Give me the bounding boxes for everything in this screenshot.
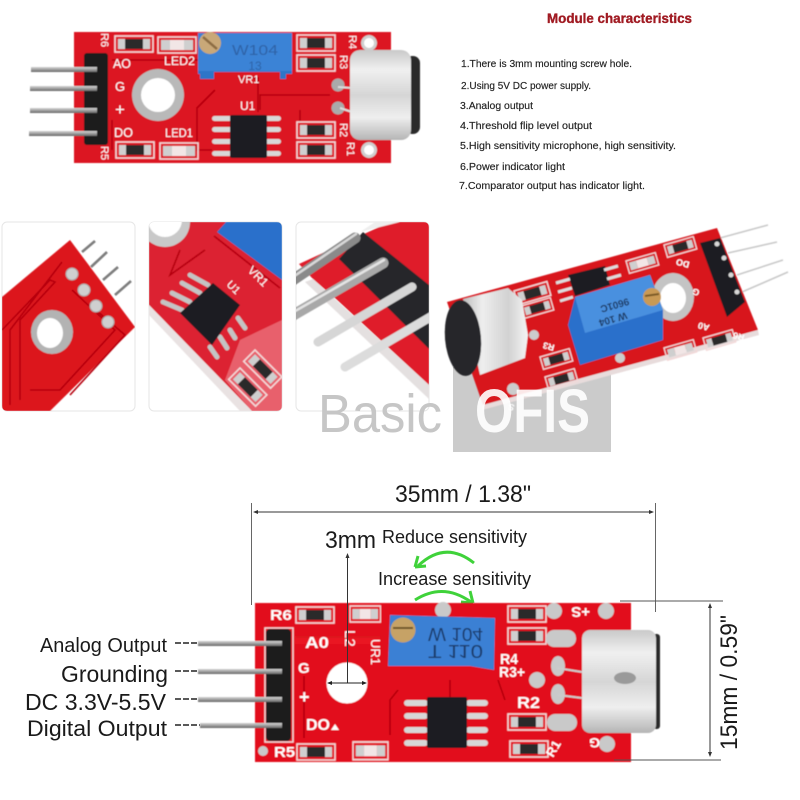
angled potentiometer: W 104 <box>597 309 628 328</box>
bottom silkscreen labels: L2 <box>341 630 358 647</box>
angled PCB <box>447 228 758 405</box>
bottom module board photo <box>198 602 660 762</box>
panel 2 PCB <box>149 222 282 411</box>
heading: module characteristics: Module characteristics <box>547 11 692 26</box>
bottom chip <box>404 697 488 748</box>
panel 3 PCB <box>299 222 429 385</box>
pin leader dashes <box>175 643 200 725</box>
panel 2 SMD <box>229 350 282 406</box>
top silkscreen labels: LED2 <box>164 54 195 68</box>
angled silkscreen labels: S <box>507 402 516 413</box>
panel: back of board detail <box>2 222 135 411</box>
watermark: Basic: Basic <box>318 384 442 444</box>
bottom traces <box>296 637 505 738</box>
panel: chip detail <box>148 222 282 412</box>
top silkscreen labels: R4 <box>346 35 358 49</box>
panel 3 pins <box>290 234 432 367</box>
panel 2 chip <box>163 275 245 357</box>
bottom silkscreen labels: R2 <box>517 695 540 712</box>
pin labels: Grounding <box>61 661 168 687</box>
height dimension: 15mm / 0.59" <box>716 615 743 750</box>
bottom pin header <box>265 628 293 742</box>
bottom silkscreen labels: DO <box>306 717 330 734</box>
top potentiometer: 13 <box>248 59 262 73</box>
angled silkscreen labels: R6 <box>732 330 746 343</box>
bottom silkscreen labels <box>270 603 600 761</box>
angled SMD parts <box>507 237 736 395</box>
top pin header <box>84 53 108 145</box>
bottom silkscreen labels: G <box>298 660 310 677</box>
bottom pins <box>198 641 282 728</box>
top silkscreen labels: R5 <box>98 146 110 160</box>
bottom potentiometer <box>388 615 495 670</box>
panel: chip detail: VR1 <box>245 263 272 290</box>
panel: chip detail: U1 <box>224 279 242 297</box>
top SMD parts <box>115 35 335 159</box>
angled silkscreen labels <box>507 257 746 413</box>
top silkscreen labels: DO <box>114 125 133 140</box>
characteristics list: 7.Comparator output has indicator light. <box>459 181 645 192</box>
top silkscreen labels: LED1 <box>165 126 193 140</box>
top pins <box>29 67 97 136</box>
angled chip <box>556 266 621 301</box>
panel: pin header detail <box>290 222 432 411</box>
angled silkscreen labels: A0 <box>697 320 711 333</box>
top silkscreen labels <box>98 33 358 160</box>
top corner holes and pads <box>332 35 377 158</box>
top silkscreen labels: R1 <box>344 142 356 156</box>
top module board photo <box>29 32 420 163</box>
top potentiometer <box>198 32 292 79</box>
bottom potentiometer: W 104 <box>428 624 483 644</box>
top silkscreen labels: AO <box>113 56 131 71</box>
characteristics list: 6.Power indicator light <box>460 162 565 173</box>
bottom PCB <box>255 603 631 762</box>
angled mounting hole <box>652 273 694 321</box>
bottom silkscreen labels: R4 <box>500 651 519 668</box>
bottom silkscreen labels: R6 <box>270 607 292 624</box>
top microphone <box>350 50 420 140</box>
bottom pads <box>258 602 615 756</box>
bottom silkscreen labels: R1 <box>543 738 564 760</box>
hole size callout: 3mm <box>325 527 376 554</box>
top potentiometer: W104 <box>232 42 278 59</box>
watermark box background <box>453 367 611 452</box>
bottom silkscreen labels: R3+ <box>499 664 525 681</box>
increase sensitivity label and arrow <box>378 569 531 603</box>
reduce sensitivity label and arrow: Reduce sensitivity <box>382 527 527 547</box>
panel 3 header block <box>339 232 429 349</box>
panel 1 hole <box>31 310 73 354</box>
pin labels: Digital Output <box>27 716 167 741</box>
angled microphone <box>442 288 528 377</box>
top silkscreen labels: G <box>115 79 125 94</box>
bottom silkscreen labels: G <box>589 735 600 751</box>
top silkscreen labels: R2 <box>337 123 349 137</box>
characteristics list <box>459 59 676 192</box>
top silkscreen labels: + <box>115 100 125 119</box>
characteristics list: 4.Threshold flip level output <box>460 121 592 132</box>
pin labels: DC 3.3V-5.5V <box>25 689 167 715</box>
increase sensitivity label and arrow: Increase sensitivity <box>378 569 531 589</box>
panel 2 hole ring <box>149 222 191 248</box>
bottom potentiometer: T 110 <box>428 641 483 661</box>
height dimension <box>614 601 743 760</box>
bottom SMD parts <box>296 606 548 760</box>
bottom microphone <box>557 630 660 733</box>
bottom silkscreen labels: + <box>299 687 310 707</box>
angled silkscreen labels: DO <box>675 257 691 270</box>
angled module photo <box>442 225 788 413</box>
top PCB traces <box>112 60 330 150</box>
top silkscreen labels: VR1 <box>238 74 259 86</box>
panel 1 pins <box>82 241 131 295</box>
angled silkscreen labels: R3 <box>542 340 556 353</box>
bottom silkscreen labels: UR1 <box>368 639 383 665</box>
top chip U1 <box>212 115 281 158</box>
angled silkscreen labels: G <box>691 286 701 298</box>
characteristics list: 2.Using 5V DC power supply. <box>461 81 591 92</box>
pin labels <box>25 635 168 741</box>
bottom mounting hole <box>326 662 368 704</box>
panel 2 potentiometer <box>217 222 282 280</box>
angled potentiometer: 9601C <box>599 295 630 314</box>
width dimension <box>252 481 656 612</box>
angled potentiometer <box>568 275 663 365</box>
hole size callout <box>325 527 376 685</box>
watermark: OFIS: OFIS <box>475 377 590 445</box>
bottom silkscreen labels: R5 <box>274 744 295 761</box>
top mounting hole <box>132 69 184 121</box>
top silkscreen labels: R3 <box>337 55 349 69</box>
bottom silkscreen labels: A0 <box>305 635 329 652</box>
top silkscreen labels: U1 <box>240 99 256 113</box>
reduce sensitivity label and arrow <box>382 527 527 567</box>
bottom silkscreen labels: +S <box>571 603 590 620</box>
pin labels: Analog Output <box>40 635 167 657</box>
characteristics list: 5.High sensitivity microphone, high sensitivity. <box>460 141 676 152</box>
characteristics list: 1.There is 3mm mounting screw hole. <box>461 59 632 70</box>
top silkscreen labels: R6 <box>98 33 110 47</box>
panel 1 PCB <box>2 240 135 411</box>
panel 1 solder pads <box>66 268 114 328</box>
top PCB <box>74 32 391 163</box>
angled pins <box>720 225 788 292</box>
width dimension: 35mm / 1.38" <box>395 481 531 508</box>
angled header <box>700 238 745 317</box>
characteristics list: 3.Analog output <box>460 101 533 112</box>
